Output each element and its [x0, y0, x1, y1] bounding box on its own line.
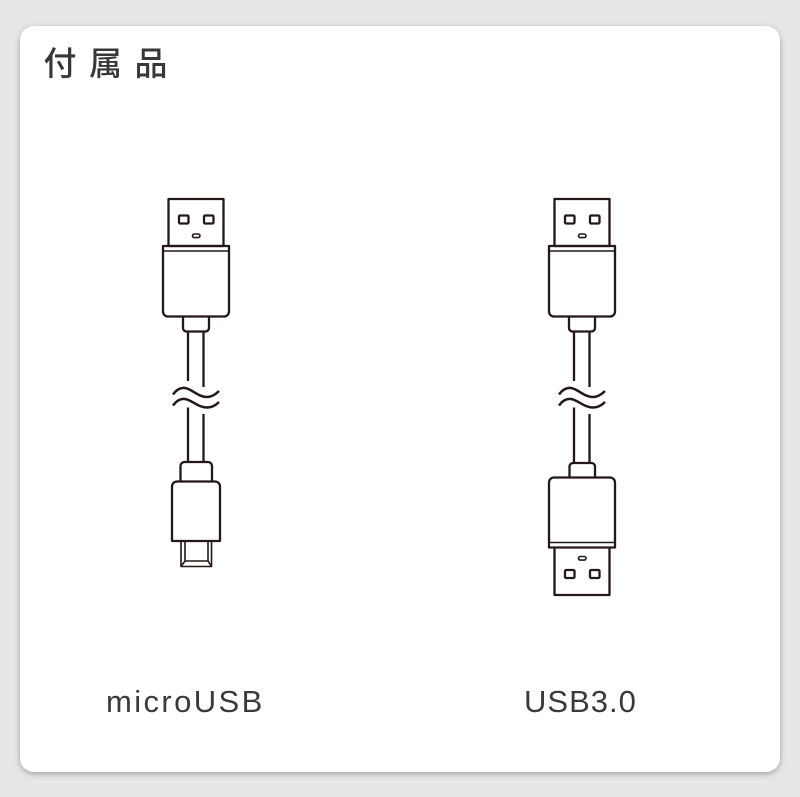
- USB-A plug: [168, 199, 224, 246]
- icon: microUSB cable: [163, 199, 229, 566]
- top connector body: [549, 246, 615, 316]
- USB-A plug bottom: [554, 548, 610, 595]
- bottom strain relief: [570, 463, 595, 478]
- lower cable: [188, 408, 204, 462]
- bottom connector body: [549, 478, 615, 548]
- upper cable: [574, 332, 590, 387]
- upper cable: [188, 332, 204, 387]
- strain relief: [183, 316, 209, 332]
- top strain relief: [569, 316, 595, 332]
- USB-A connector body: [163, 246, 229, 316]
- break mark: [173, 388, 219, 408]
- break mark: [559, 388, 605, 408]
- title: 付属品: [44, 37, 180, 85]
- icon: USB3.0 cable: [549, 199, 615, 595]
- USB-A plug top: [554, 199, 610, 246]
- label: USB3.0: USB3.0: [524, 684, 637, 719]
- label: microUSB: microUSB: [106, 684, 265, 719]
- lower cable: [574, 408, 590, 463]
- micro tip: [181, 541, 212, 566]
- micro connector body: [172, 482, 220, 541]
- micro strain relief: [180, 462, 212, 481]
